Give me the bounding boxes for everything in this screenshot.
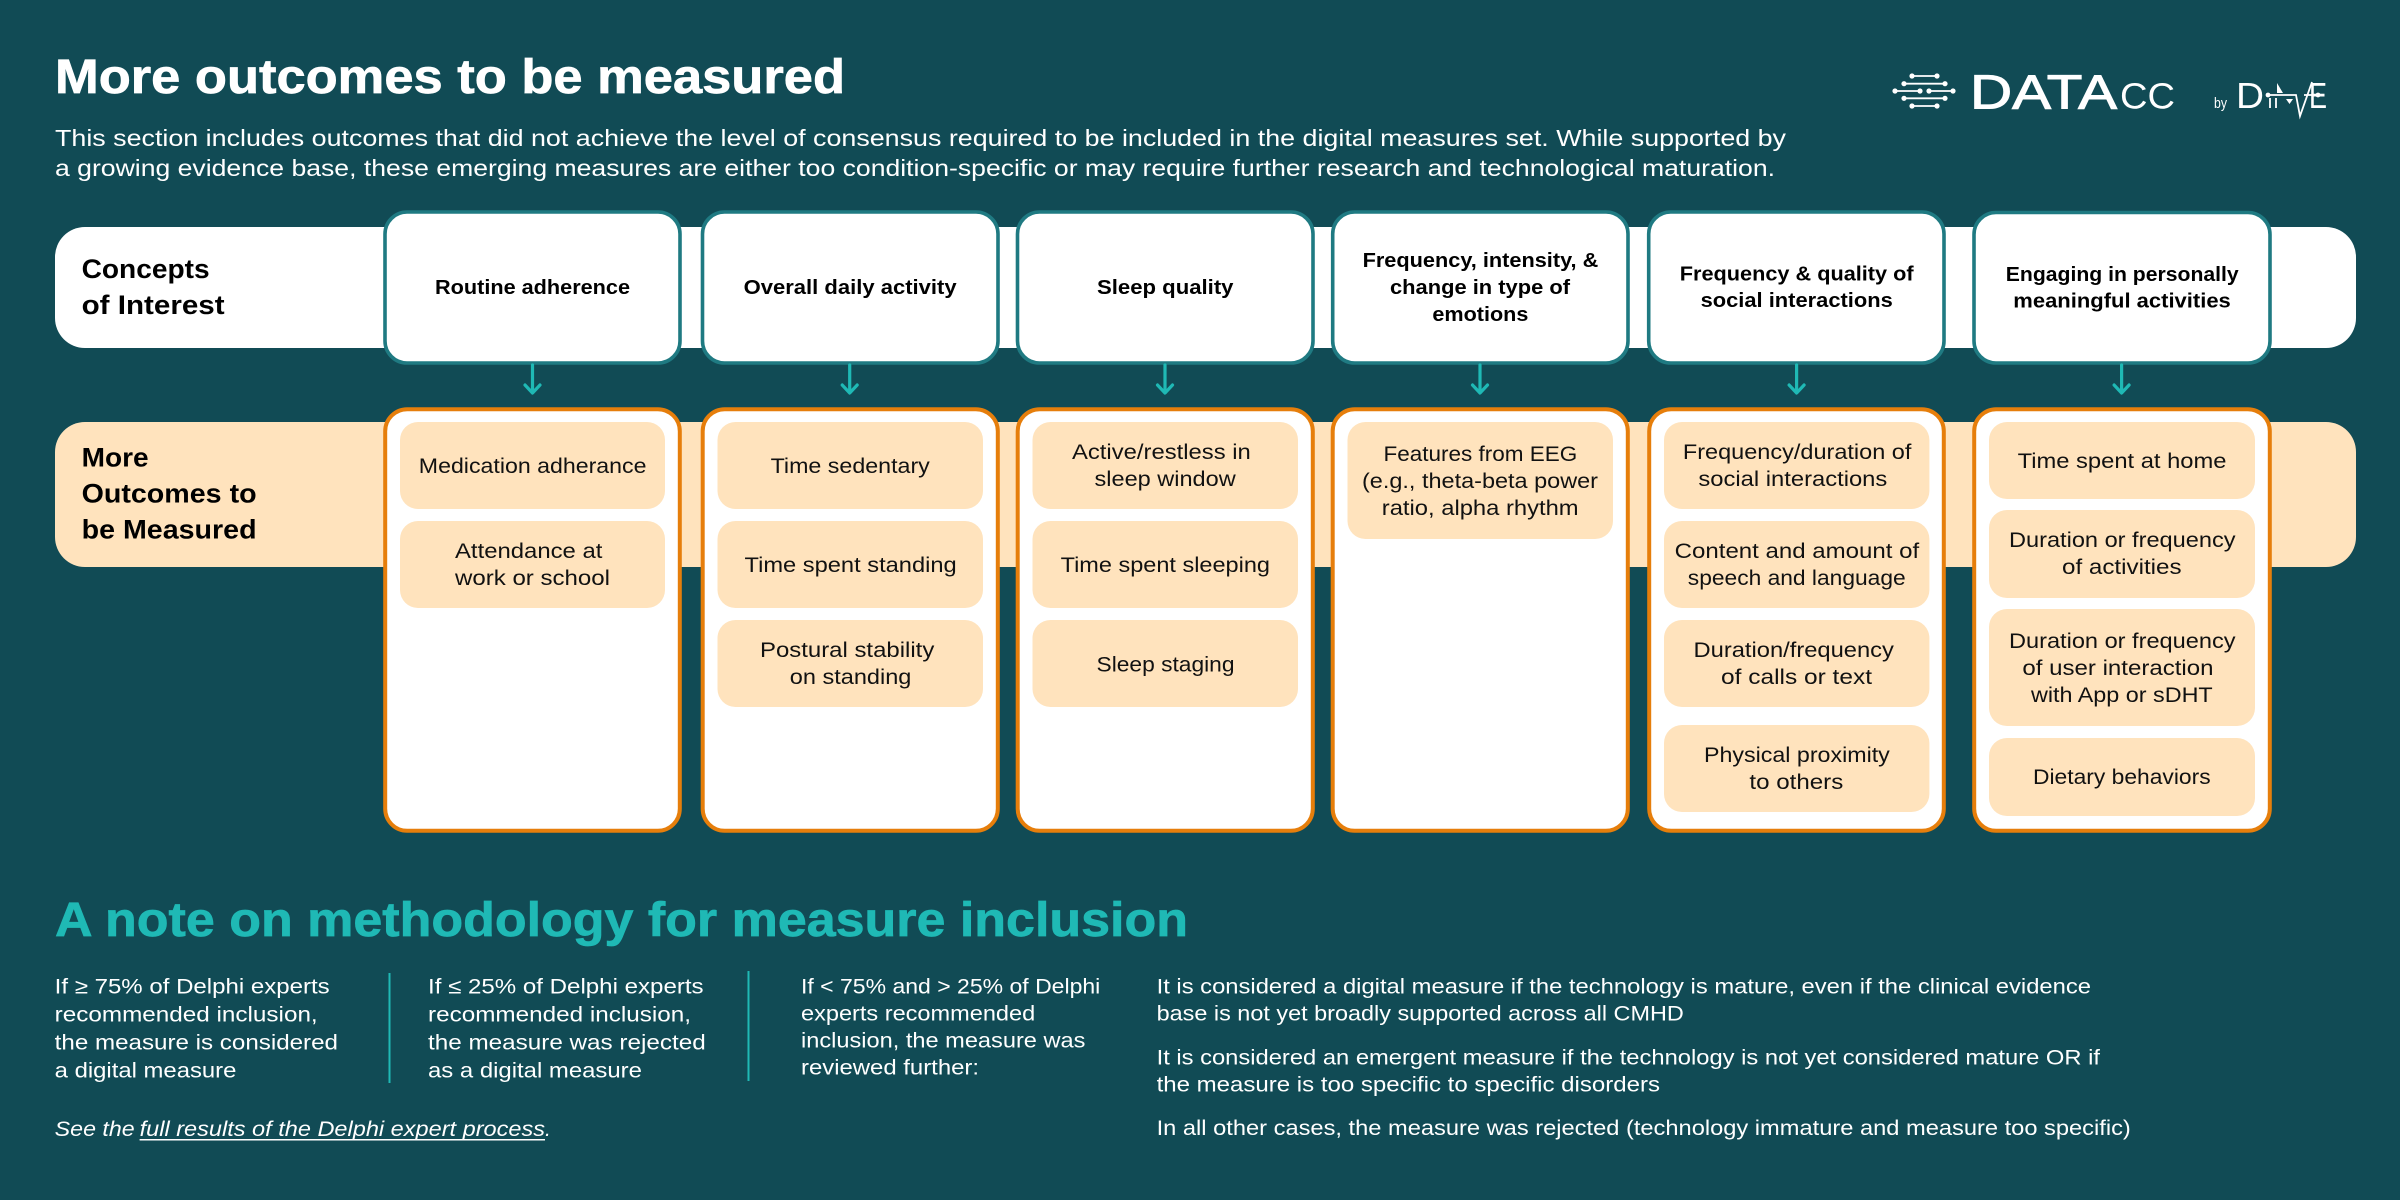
outcomes column: routine adherence (385, 409, 680, 831)
card: medication adherance (400, 422, 665, 509)
card: dietary behaviors: Dietary behaviors (2033, 765, 2211, 789)
divider (748, 971, 750, 1081)
card: time at home (1989, 422, 2255, 499)
text block: at least 75 percent: recommended inclusion, (55, 1004, 318, 1027)
card: frequency duration: social interactions (1698, 467, 1887, 491)
logo: DATAcc by DiME: DATA (1970, 66, 2117, 119)
concept column: emotions: change in type of (1390, 277, 1570, 299)
card: calls or text: of calls or text (1721, 665, 1872, 689)
text block: at least 75 percent: the measure is considered (55, 1032, 338, 1055)
card: calls or text: Duration/frequency (1694, 638, 1894, 662)
card: attendance: work or school (454, 566, 610, 590)
card: time spent sleeping: Time spent sleeping (1061, 553, 1270, 577)
footnote: link to Delphi results: . (545, 1118, 551, 1141)
text block: at most 25 percent: recommended inclusion, (428, 1004, 691, 1027)
divider (388, 973, 390, 1083)
card: features from EEG (1348, 422, 1613, 539)
arrow: emotions (1472, 365, 1488, 393)
text block: review criteria: base is not yet broadly supported across all CMHD (1157, 1003, 1684, 1026)
intro text (55, 125, 1786, 181)
text block: review criteria: the measure is too specific to specific disorders (1157, 1074, 1660, 1097)
text block: at least 75 percent (55, 975, 338, 1083)
concept column: routine adherence: Routine adherence (435, 277, 630, 299)
card: user interaction: of user interaction (2022, 656, 2214, 680)
card: content and amount: speech and language (1688, 566, 1906, 590)
title: More outcomes to be measured (55, 51, 845, 104)
footnote: link to Delphi results: See the (55, 1118, 135, 1141)
arrow: routine adherence (525, 365, 540, 393)
card: time at home: Time spent at home (2018, 449, 2226, 473)
concept column: meaningful activities (1974, 212, 2270, 363)
card: user interaction (1989, 609, 2255, 726)
card: frequency duration (1664, 422, 1929, 509)
concept column: emotions (1333, 212, 1628, 363)
text block: review criteria (1157, 975, 2131, 1140)
row label: more outcomes to be measured: be Measured (82, 515, 257, 545)
concept column: emotions: Frequency, intensity, & (1363, 250, 1598, 272)
row label: concepts of interest (82, 254, 225, 320)
card: features from EEG: (e.g., theta-beta power (1362, 469, 1598, 493)
outcomes column: sleep quality (1018, 409, 1313, 831)
card: attendance: Attendance at (455, 539, 602, 563)
card: active restless: Active/restless in (1072, 440, 1251, 464)
text block: review criteria: It is considered a digital measure if the technology is mature, even if the clinical evidence (1157, 975, 2091, 998)
text block: review criteria: It is considered an emergent measure if the technology is not yet considered mature OR if (1157, 1047, 2100, 1070)
row label: more outcomes to be measured: More (82, 443, 149, 473)
card: duration of activities (1989, 510, 2255, 598)
card: medication adherance: Medication adherance (419, 454, 646, 478)
concept column: overall daily activity: Overall daily activity (744, 277, 958, 299)
concept column: meaningful activities: Engaging in personally (2006, 264, 2240, 286)
outcomes column: social interactions (1649, 409, 1944, 831)
text block: between 25 and 75 percent: If < 75% and > 25% of Delphi (801, 975, 1100, 998)
intro text: a growing evidence base, these emerging measures are either too condition-specific or may require further research and technological maturation. (55, 155, 1775, 181)
card: attendance (400, 521, 665, 608)
footnote: link to Delphi results: full results of the Delphi expert process (140, 1118, 546, 1141)
text block: between 25 and 75 percent: experts recommended (801, 1003, 1035, 1026)
card: user interaction: Duration or frequency (2009, 629, 2236, 653)
logo: DATAcc by DiME: D (2236, 75, 2264, 116)
card: physical proximity: Physical proximity (1704, 743, 1890, 767)
concept column: sleep quality (1018, 212, 1313, 363)
card: active restless: sleep window (1094, 467, 1236, 491)
card: duration of activities: of activities (2062, 555, 2182, 579)
text block: between 25 and 75 percent: inclusion, the measure was (801, 1030, 1085, 1053)
card: calls or text (1664, 620, 1929, 707)
card: physical proximity: to others (1749, 770, 1843, 794)
card: postural stability: on standing (790, 665, 911, 689)
card: content and amount: Content and amount of (1675, 539, 1919, 563)
concept column: social interactions (1649, 212, 1944, 363)
card: time spent sleeping (1032, 521, 1298, 608)
card: features from EEG: ratio, alpha rhythm (1382, 496, 1579, 520)
card: sleep staging: Sleep staging (1096, 652, 1234, 676)
card: user interaction: with App or sDHT (2030, 683, 2213, 707)
card: content and amount (1664, 521, 1929, 608)
card: postural stability (718, 620, 983, 707)
card: time spent standing (718, 521, 983, 608)
concept column: overall daily activity (702, 212, 998, 363)
concept column: emotions: emotions (1432, 304, 1528, 326)
concept column: meaningful activities: meaningful activities (2013, 291, 2231, 313)
card: time sedentary (718, 422, 983, 509)
card: time sedentary: Time sedentary (771, 454, 930, 478)
text block: at most 25 percent: If ≤ 25% of Delphi experts (428, 975, 704, 998)
text block: at most 25 percent (428, 975, 706, 1083)
card: features from EEG: Features from EEG (1384, 442, 1577, 466)
arrow: sleep quality (1158, 365, 1172, 393)
concept column: social interactions: social interactions (1701, 290, 1893, 312)
arrow: meaningful activities (2114, 365, 2129, 393)
row label: more outcomes to be measured (82, 443, 257, 545)
card: frequency duration: Frequency/duration of (1683, 440, 1911, 464)
band: more outcomes row (55, 422, 2356, 567)
outcomes column: overall daily activity (703, 409, 998, 831)
logo: DATAcc by DiME: by (2214, 95, 2227, 112)
text block: between 25 and 75 percent: reviewed further: (801, 1057, 979, 1080)
card: physical proximity (1664, 725, 1929, 812)
text block: between 25 and 75 percent (801, 975, 1100, 1080)
card: active restless (1032, 422, 1298, 509)
text block: at least 75 percent: If ≥ 75% of Delphi experts (55, 975, 330, 998)
row label: concepts of interest: of Interest (82, 290, 225, 320)
band: concepts of interest row (55, 227, 2356, 348)
text block: at most 25 percent: the measure was rejected (428, 1032, 706, 1055)
row label: more outcomes to be measured: Outcomes to (82, 479, 257, 509)
concept column: social interactions: Frequency & quality of (1680, 264, 1914, 286)
card: time spent standing: Time spent standing (744, 553, 957, 577)
logo: DATAcc by DiME (1892, 66, 2327, 119)
heading: methodology note: A note on methodology for measure inclusion (55, 894, 1188, 947)
logo: DATAcc by DiME: CC (2120, 75, 2175, 116)
text block: at most 25 percent: as a digital measure (428, 1060, 642, 1083)
arrow: overall daily activity (842, 365, 857, 393)
icon: circuit lines (1892, 73, 1956, 109)
card: duration of activities: Duration or frequency (2009, 528, 2236, 552)
outcomes column: emotions (1333, 409, 1628, 831)
logo: DATAcc by DiME: E (2309, 75, 2327, 116)
text block: at least 75 percent: a digital measure (55, 1060, 236, 1083)
card: postural stability: Postural stability (760, 638, 935, 662)
card: dietary behaviors (1989, 738, 2255, 816)
intro text: This section includes outcomes that did not achieve the level of consensus required to be included in the digital measures set. While supported by (55, 125, 1786, 151)
outcomes column: meaningful activities (1974, 409, 2270, 831)
concept column: sleep quality: Sleep quality (1097, 277, 1234, 299)
card: sleep staging (1032, 620, 1298, 707)
row label: concepts of interest: Concepts (82, 254, 210, 284)
text block: review criteria: In all other cases, the measure was rejected (technology immature and measure too specific) (1157, 1117, 2131, 1140)
arrow: social interactions (1789, 365, 1804, 393)
concept column: routine adherence (385, 212, 680, 363)
